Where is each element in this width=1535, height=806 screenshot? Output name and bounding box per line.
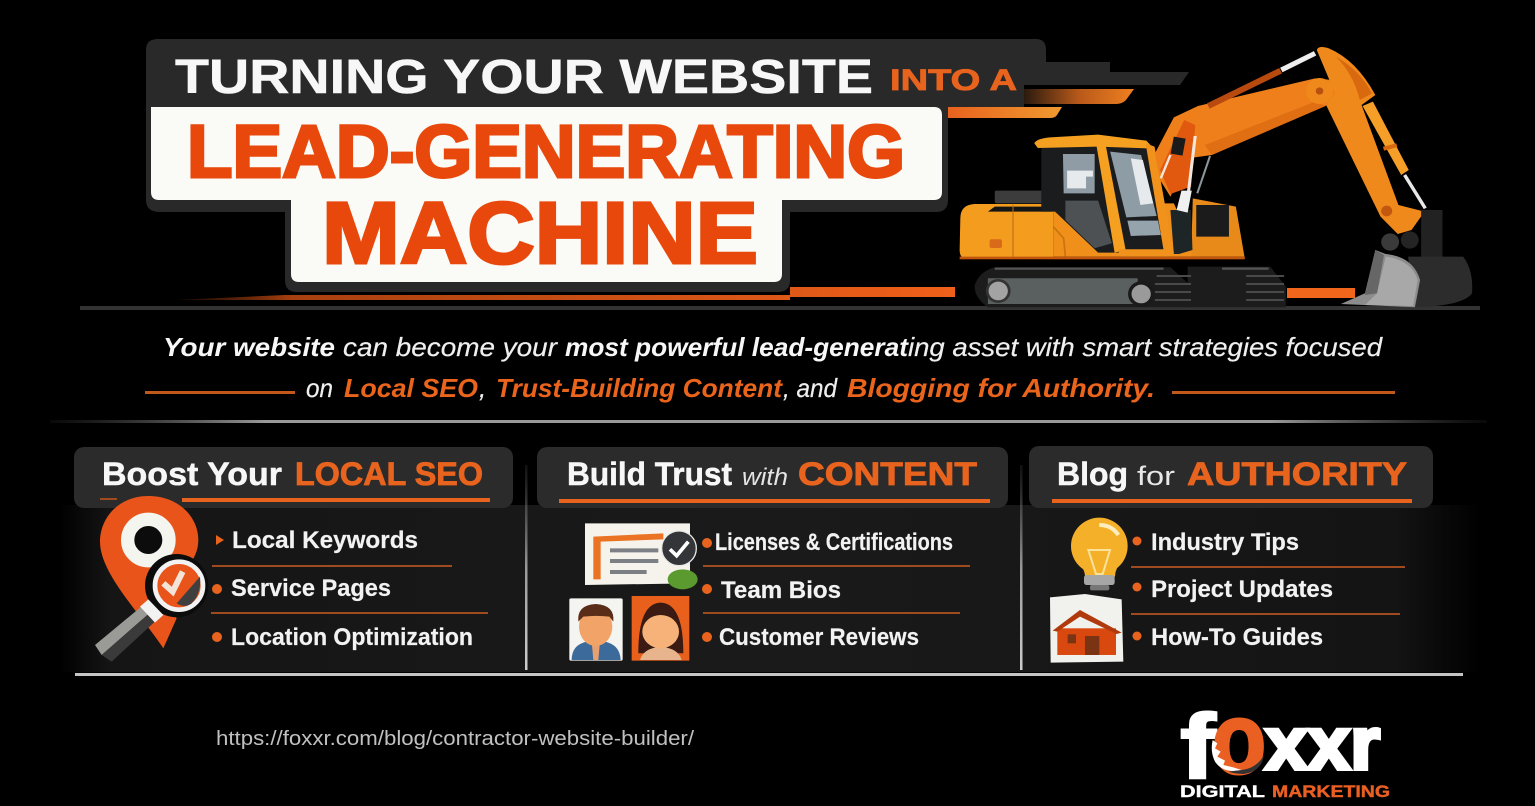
- panel: trust content: [537, 447, 1008, 661]
- list: content items: Team Bios: [721, 577, 841, 604]
- logo: foxxr digital marketing: MARKETING: [1272, 783, 1390, 801]
- title banner: INTO A: [890, 64, 1017, 97]
- list: local SEO items: [211, 527, 488, 651]
- intro text: ing asset with smart strategies focused: [908, 332, 1384, 362]
- heading: boost your local SEO: LOCAL SEO: [295, 456, 483, 492]
- machine body: [960, 204, 1053, 258]
- list: content items: Licenses & Certifications: [715, 529, 953, 556]
- intro text: Blogging for Authority.: [847, 373, 1155, 403]
- list: local SEO items: Local Keywords: [232, 527, 418, 554]
- logo: foxxr digital marketing: o: [1212, 683, 1266, 795]
- list: local SEO items: Location Optimization: [231, 624, 473, 651]
- intro text: Local SEO: [344, 373, 478, 403]
- icon: team portraits: [569, 596, 689, 661]
- list: local SEO items: Service Pages: [231, 575, 391, 602]
- list: blog items: Industry Tips: [1151, 529, 1299, 556]
- bucket: [1421, 210, 1442, 258]
- heading: boost your local SEO: [100, 456, 490, 502]
- ground strip and line: [80, 287, 1480, 310]
- intro text: , and: [783, 373, 838, 403]
- heading: build trust with content: with: [742, 464, 788, 491]
- intro text: Trust-Building Content: [496, 373, 783, 403]
- logo: foxxr digital marketing: f: [1180, 696, 1216, 798]
- list: content items: Customer Reviews: [719, 624, 919, 651]
- title banner: [146, 39, 1189, 292]
- title banner: TURNING YOUR WEBSITE: [175, 51, 873, 104]
- source url: https://foxxr.com/blog/contractor-website-builder/: [216, 728, 694, 750]
- logo: foxxr digital marketing: xxr: [1265, 702, 1380, 785]
- heading: build trust with content: CONTENT: [798, 456, 978, 492]
- track front: [975, 267, 1192, 307]
- list: blog items: [1131, 529, 1405, 651]
- intro text: on: [306, 373, 333, 403]
- icon: map pin with magnifier: [95, 496, 208, 662]
- heading: build trust with content: [559, 456, 990, 503]
- list: blog items: How-To Guides: [1151, 624, 1323, 651]
- list: content items: [702, 529, 970, 651]
- title banner: LEAD-GENERATING: [187, 110, 905, 193]
- arm: [1317, 47, 1425, 234]
- heading: boost your local SEO: Boost Your: [102, 456, 282, 492]
- cab: [1041, 147, 1171, 253]
- icon: house document: [1050, 594, 1123, 663]
- heading: build trust with content: Build Trust: [567, 456, 732, 492]
- panel: local SEO: [74, 447, 513, 662]
- logo: foxxr digital marketing: [1180, 683, 1390, 801]
- excavator illustration: [960, 47, 1472, 307]
- icon: certificate with check: [585, 523, 698, 589]
- logo: foxxr digital marketing: DIGITAL: [1180, 783, 1265, 801]
- intro text: can become your: [343, 332, 558, 362]
- title banner: MACHINE: [322, 185, 758, 282]
- panel: blog authority: [1029, 446, 1433, 663]
- list: blog items: Project Updates: [1151, 576, 1333, 603]
- orange speed bars: [948, 89, 1134, 118]
- icon: light bulb: [1071, 518, 1128, 590]
- intro text: most powerful lead-generat: [565, 332, 909, 362]
- track rear: [1188, 267, 1286, 307]
- intro text: ,: [479, 373, 486, 403]
- heading: blog for authority: for: [1137, 461, 1175, 491]
- heading: blog for authority: [1052, 456, 1412, 503]
- intro text: [163, 332, 1384, 403]
- intro text: Your website: [163, 332, 335, 362]
- heading: blog for authority: AUTHORITY: [1187, 456, 1407, 492]
- boom: [1155, 78, 1336, 197]
- heading: blog for authority: Blog: [1057, 456, 1128, 492]
